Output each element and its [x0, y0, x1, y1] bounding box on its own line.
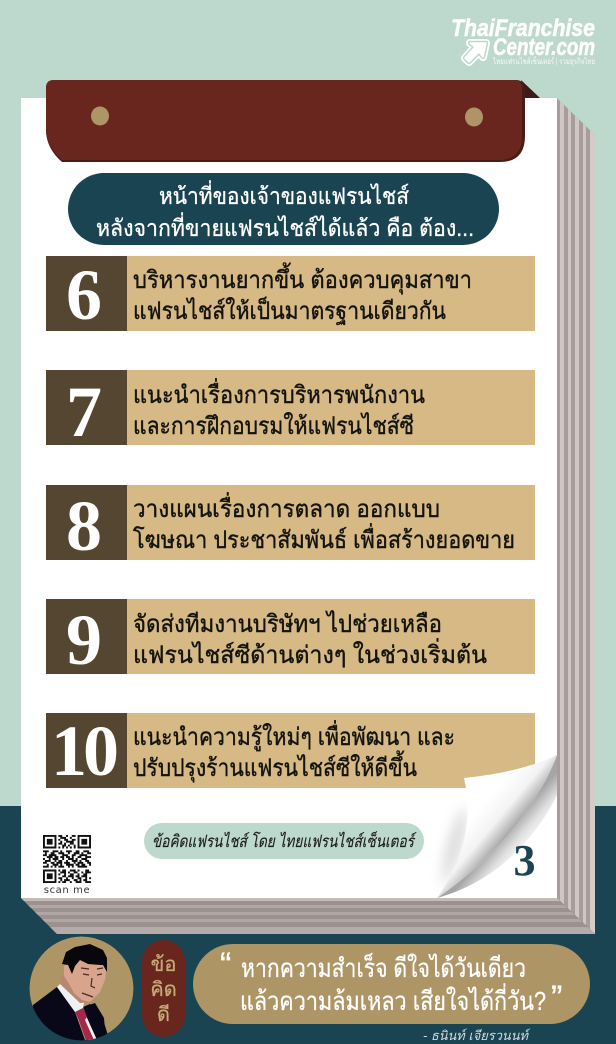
item 10: ปรับปรุงร้านแฟรนไชส์ซีให้ดีขึ้น — [133, 750, 417, 783]
item 10 — [46, 711, 535, 791]
background: mint upper band — [0, 0, 616, 806]
item 8: วางแผนเรื่องการตลาด ออกแบบ — [133, 492, 440, 523]
item 9: จัดส่งทีมงานบริษัทฯ ไปช่วยเหลือ — [133, 610, 442, 638]
suit — [30, 987, 110, 1042]
portrait: man in suit — [30, 936, 134, 1042]
QR code — [43, 835, 91, 883]
item 10: แนะนำความรู้ใหม่ๆ เพื่อพัฒนา และ — [133, 720, 455, 752]
brows, eyes, nose and mouth — [81, 968, 103, 997]
quote pill: หากความสำเร็จ ดีใจได้วันเดียว — [241, 952, 526, 983]
item 8: โฆษณา ประชาสัมพันธ์ เพื่อสร้างยอดขาย — [133, 523, 515, 554]
item 6 — [46, 255, 535, 335]
badge: ข้อ คิด ดี: ข้อ — [151, 954, 176, 976]
heading pill: หลังจากที่ขายแฟรนไชส์ได้แล้ว คือ ต้อง... — [96, 212, 474, 241]
item 9: 9 — [66, 600, 102, 680]
item 7: 7 — [66, 372, 102, 452]
quote pill: แล้วความล้มเหลว เสียใจได้กี่วัน? — [240, 983, 546, 1016]
badge: ข้อ คิด ดี: คิด — [150, 979, 177, 1001]
item 6: บริหารงานยากขึ้น ต้องควบคุมสาขา — [133, 262, 472, 295]
heading pill: หน้าที่ของเจ้าของแฟรนไชส์ — [159, 180, 409, 209]
item 8: 8 — [66, 486, 102, 566]
binder clip: maroon header — [46, 80, 540, 162]
badge: ข้อ คิด ดี — [142, 940, 185, 1037]
quote pill: ” — [551, 979, 562, 1017]
background: dark teal lower band — [0, 806, 616, 1044]
item 6: 6 — [66, 255, 102, 335]
logo: ThaiFranchise Center — [451, 15, 595, 66]
tie — [75, 1008, 94, 1040]
rivet right — [465, 108, 483, 126]
item 7: และการฝึกอบรมให้แฟรนไชส์ซี — [133, 412, 414, 440]
quote pill: “ — [220, 946, 231, 984]
caption pill: ข้อคิดแฟรนไชส์ โดย ไทยแฟรนไชส์เซ็นเตอร์ — [152, 831, 417, 851]
heading pill — [68, 173, 499, 245]
quote attribution: - ธนินท์ เจียรวนนท์ — [423, 1028, 531, 1043]
quote pill — [193, 944, 590, 1024]
item 10: 10 — [51, 711, 117, 791]
item 8 — [46, 485, 535, 566]
page curl — [437, 755, 557, 898]
ear and face — [64, 960, 106, 1002]
neck — [60, 975, 92, 1003]
item 6: แฟรนไชส์ให้เป็นมาตรฐานเดียวกัน — [133, 296, 446, 325]
hair — [62, 944, 107, 974]
page number: 3 — [514, 836, 536, 885]
shirt collar — [57, 983, 97, 1040]
item 7: แนะนำเรื่องการบริหารพนักงาน — [133, 378, 425, 409]
calendar page: white sheet — [21, 98, 557, 898]
item 7 — [46, 370, 535, 452]
calendar page stack: right edge — [557, 90, 595, 940]
rivet left — [91, 106, 109, 126]
badge: ข้อ คิด ดี: ดี — [157, 1004, 170, 1026]
caption pill — [144, 823, 424, 859]
logo: ThaiFranchise Center: ThaiFranchise — [451, 15, 595, 42]
item 9 — [46, 599, 535, 680]
scan me label: scan me — [44, 885, 90, 896]
item 9: แฟรนไชส์ซีด้านต่างๆ ในช่วงเริ่มต้น — [133, 638, 487, 669]
calendar page stack: bottom edge — [20, 898, 596, 934]
